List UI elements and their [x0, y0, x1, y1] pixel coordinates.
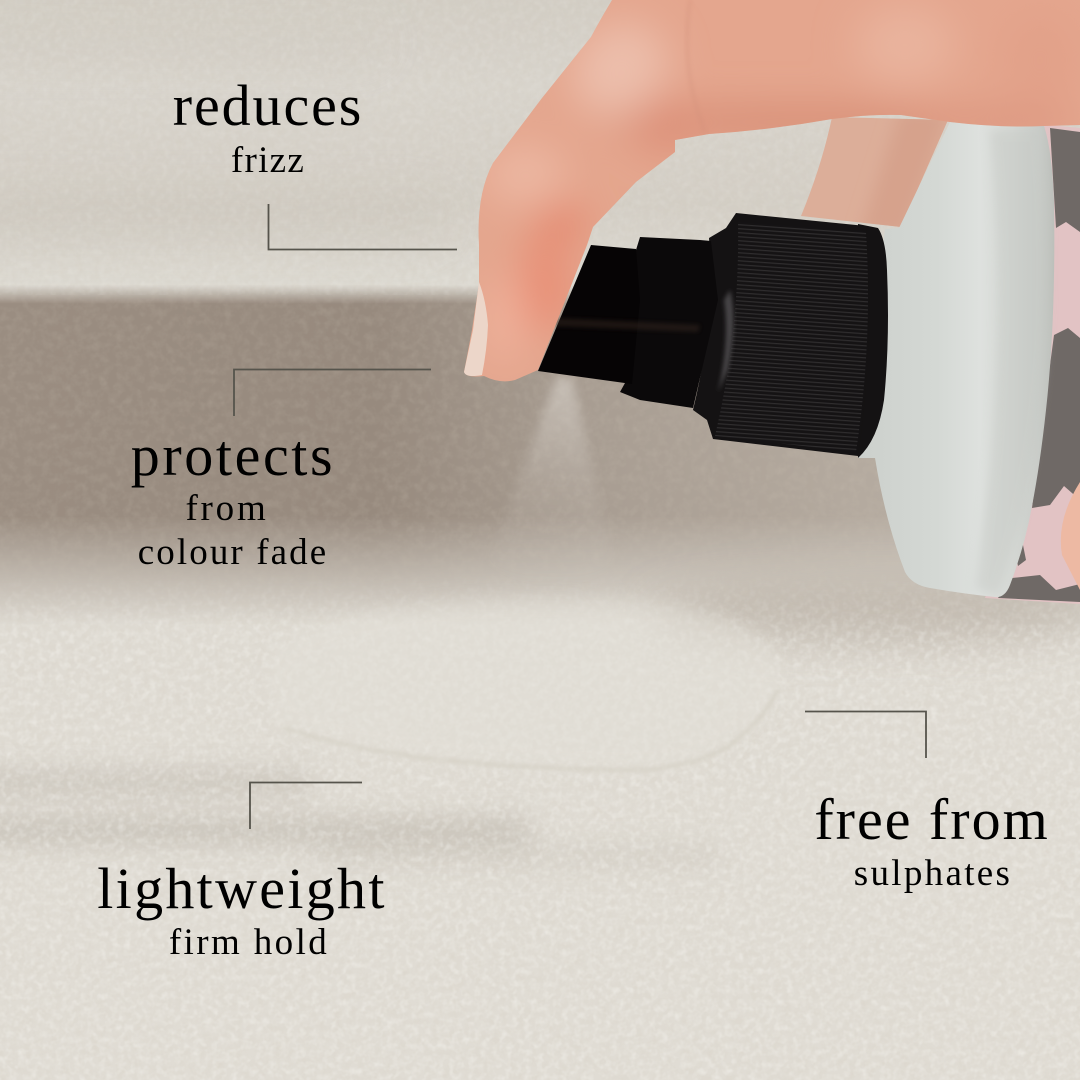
shadow band	[0, 287, 936, 614]
index finger	[460, 0, 1080, 390]
ribbed ring	[693, 213, 869, 456]
heading: free from: free from	[814, 787, 1050, 852]
callout: free from sulphates	[814, 787, 1050, 894]
right thumb	[1061, 482, 1080, 590]
heading: lightweight: lightweight	[97, 856, 387, 921]
skin shading	[490, 10, 1052, 328]
subtext: firm hold: firm hold	[169, 922, 329, 963]
surface mottling top	[0, 30, 440, 236]
nozzle reflection	[553, 318, 700, 332]
nozzle middle	[620, 237, 718, 408]
lower right shadow	[650, 578, 1080, 646]
subtext: frizz: frizz	[231, 140, 305, 181]
fingernail	[464, 282, 488, 376]
heading: protects: protects	[131, 423, 335, 488]
streak shadows	[0, 772, 720, 866]
callout: protects from colour fade	[131, 423, 335, 573]
subtext: from: from	[185, 488, 269, 529]
subtext: sulphates: sulphates	[854, 853, 1012, 894]
nozzle tip	[538, 245, 640, 384]
lotion puddle	[269, 599, 780, 770]
bottle label pattern	[998, 128, 1080, 602]
subtext: colour fade: colour fade	[138, 532, 328, 573]
spray mist	[490, 378, 612, 585]
callout: lightweight firm hold	[97, 856, 387, 963]
bottle label	[985, 124, 1080, 604]
heading: reduces: reduces	[173, 73, 363, 138]
callout: reduces frizz	[173, 73, 363, 181]
ring flange highlight	[718, 290, 734, 392]
nozzle collar	[858, 224, 888, 458]
ring ribs	[715, 222, 868, 452]
back finger	[801, 118, 948, 227]
knuckle crease	[687, 0, 705, 132]
bottle cap	[858, 122, 1054, 597]
bottle cap shaded face	[975, 130, 1048, 594]
